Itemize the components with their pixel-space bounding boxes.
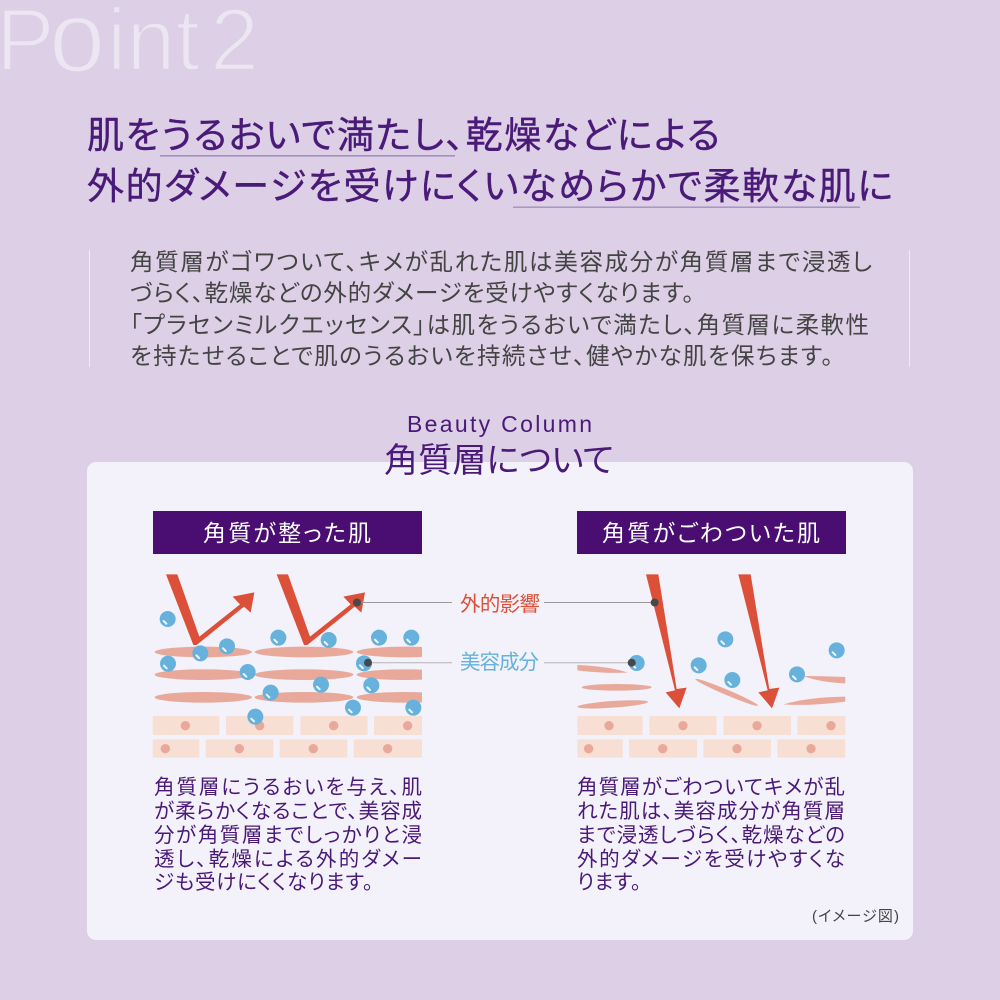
text: rough skin description: 角質層がごわついてキメが乱 xyxy=(577,776,845,799)
text: smooth skin description: ジも受けにくくなります。 xyxy=(154,871,373,894)
heading: smooth skin xyxy=(153,511,422,554)
intro paragraph: を持たせることで肌のうるおいを持続させ、健やかな肌を保ちます。 xyxy=(130,343,833,369)
diagram: smooth skin xyxy=(152,574,422,758)
text: smooth skin description: が柔らかくなることで、美容成 xyxy=(154,800,422,823)
text: smooth skin description xyxy=(154,776,422,894)
text: smooth skin description: 分が角質層までしっかりと浸 xyxy=(154,824,422,847)
callout: external influence: 外的影響 xyxy=(460,593,540,616)
intro paragraph xyxy=(89,249,910,369)
intro paragraph: 角質層がゴワついて、キメが乱れた肌は美容成分が角質層まで浸透し xyxy=(130,249,872,275)
heading: smooth skin: 角質が整った肌 xyxy=(203,520,371,546)
diagram: rough skin xyxy=(577,574,851,758)
intro paragraph: づらく、乾燥などの外的ダメージを受けやすくなります。 xyxy=(130,280,694,306)
text: rough skin description: 外的ダメージを受けやすくな xyxy=(577,848,845,871)
column label: Beauty Column xyxy=(407,411,592,437)
callout: beauty ingredients xyxy=(364,651,636,674)
title: 肌をうるおいで満たし、乾燥などによる xyxy=(87,115,720,156)
text: rough skin description: ります。 xyxy=(577,871,641,894)
callout: beauty ingredients: 美容成分 xyxy=(460,651,540,674)
heading: rough skin: 角質がごわついた肌 xyxy=(602,520,820,546)
callout: external influence xyxy=(353,593,659,616)
text: rough skin description: まで浸透しづらく、乾燥などの xyxy=(577,824,845,847)
image note: (イメージ図) xyxy=(812,908,899,925)
text: smooth skin description: 透し、乾燥による外的ダメー xyxy=(154,848,422,871)
intro paragraph: 「プラセンミルクエッセンス」は肌をうるおいで満たし、角質層に柔軟性 xyxy=(130,312,869,338)
text: smooth skin description: 角質層にうるおいを与え、肌 xyxy=(154,776,422,799)
text: rough skin description: れた肌は、美容成分が角質層 xyxy=(577,800,845,823)
heading: rough skin xyxy=(577,511,846,554)
column heading: 角質層について xyxy=(384,442,614,480)
text: rough skin description xyxy=(577,776,845,894)
panel: beauty column xyxy=(87,462,913,940)
title: 外的ダメージを受けにくいなめらかで柔軟な肌に xyxy=(87,166,893,207)
title xyxy=(87,115,893,208)
